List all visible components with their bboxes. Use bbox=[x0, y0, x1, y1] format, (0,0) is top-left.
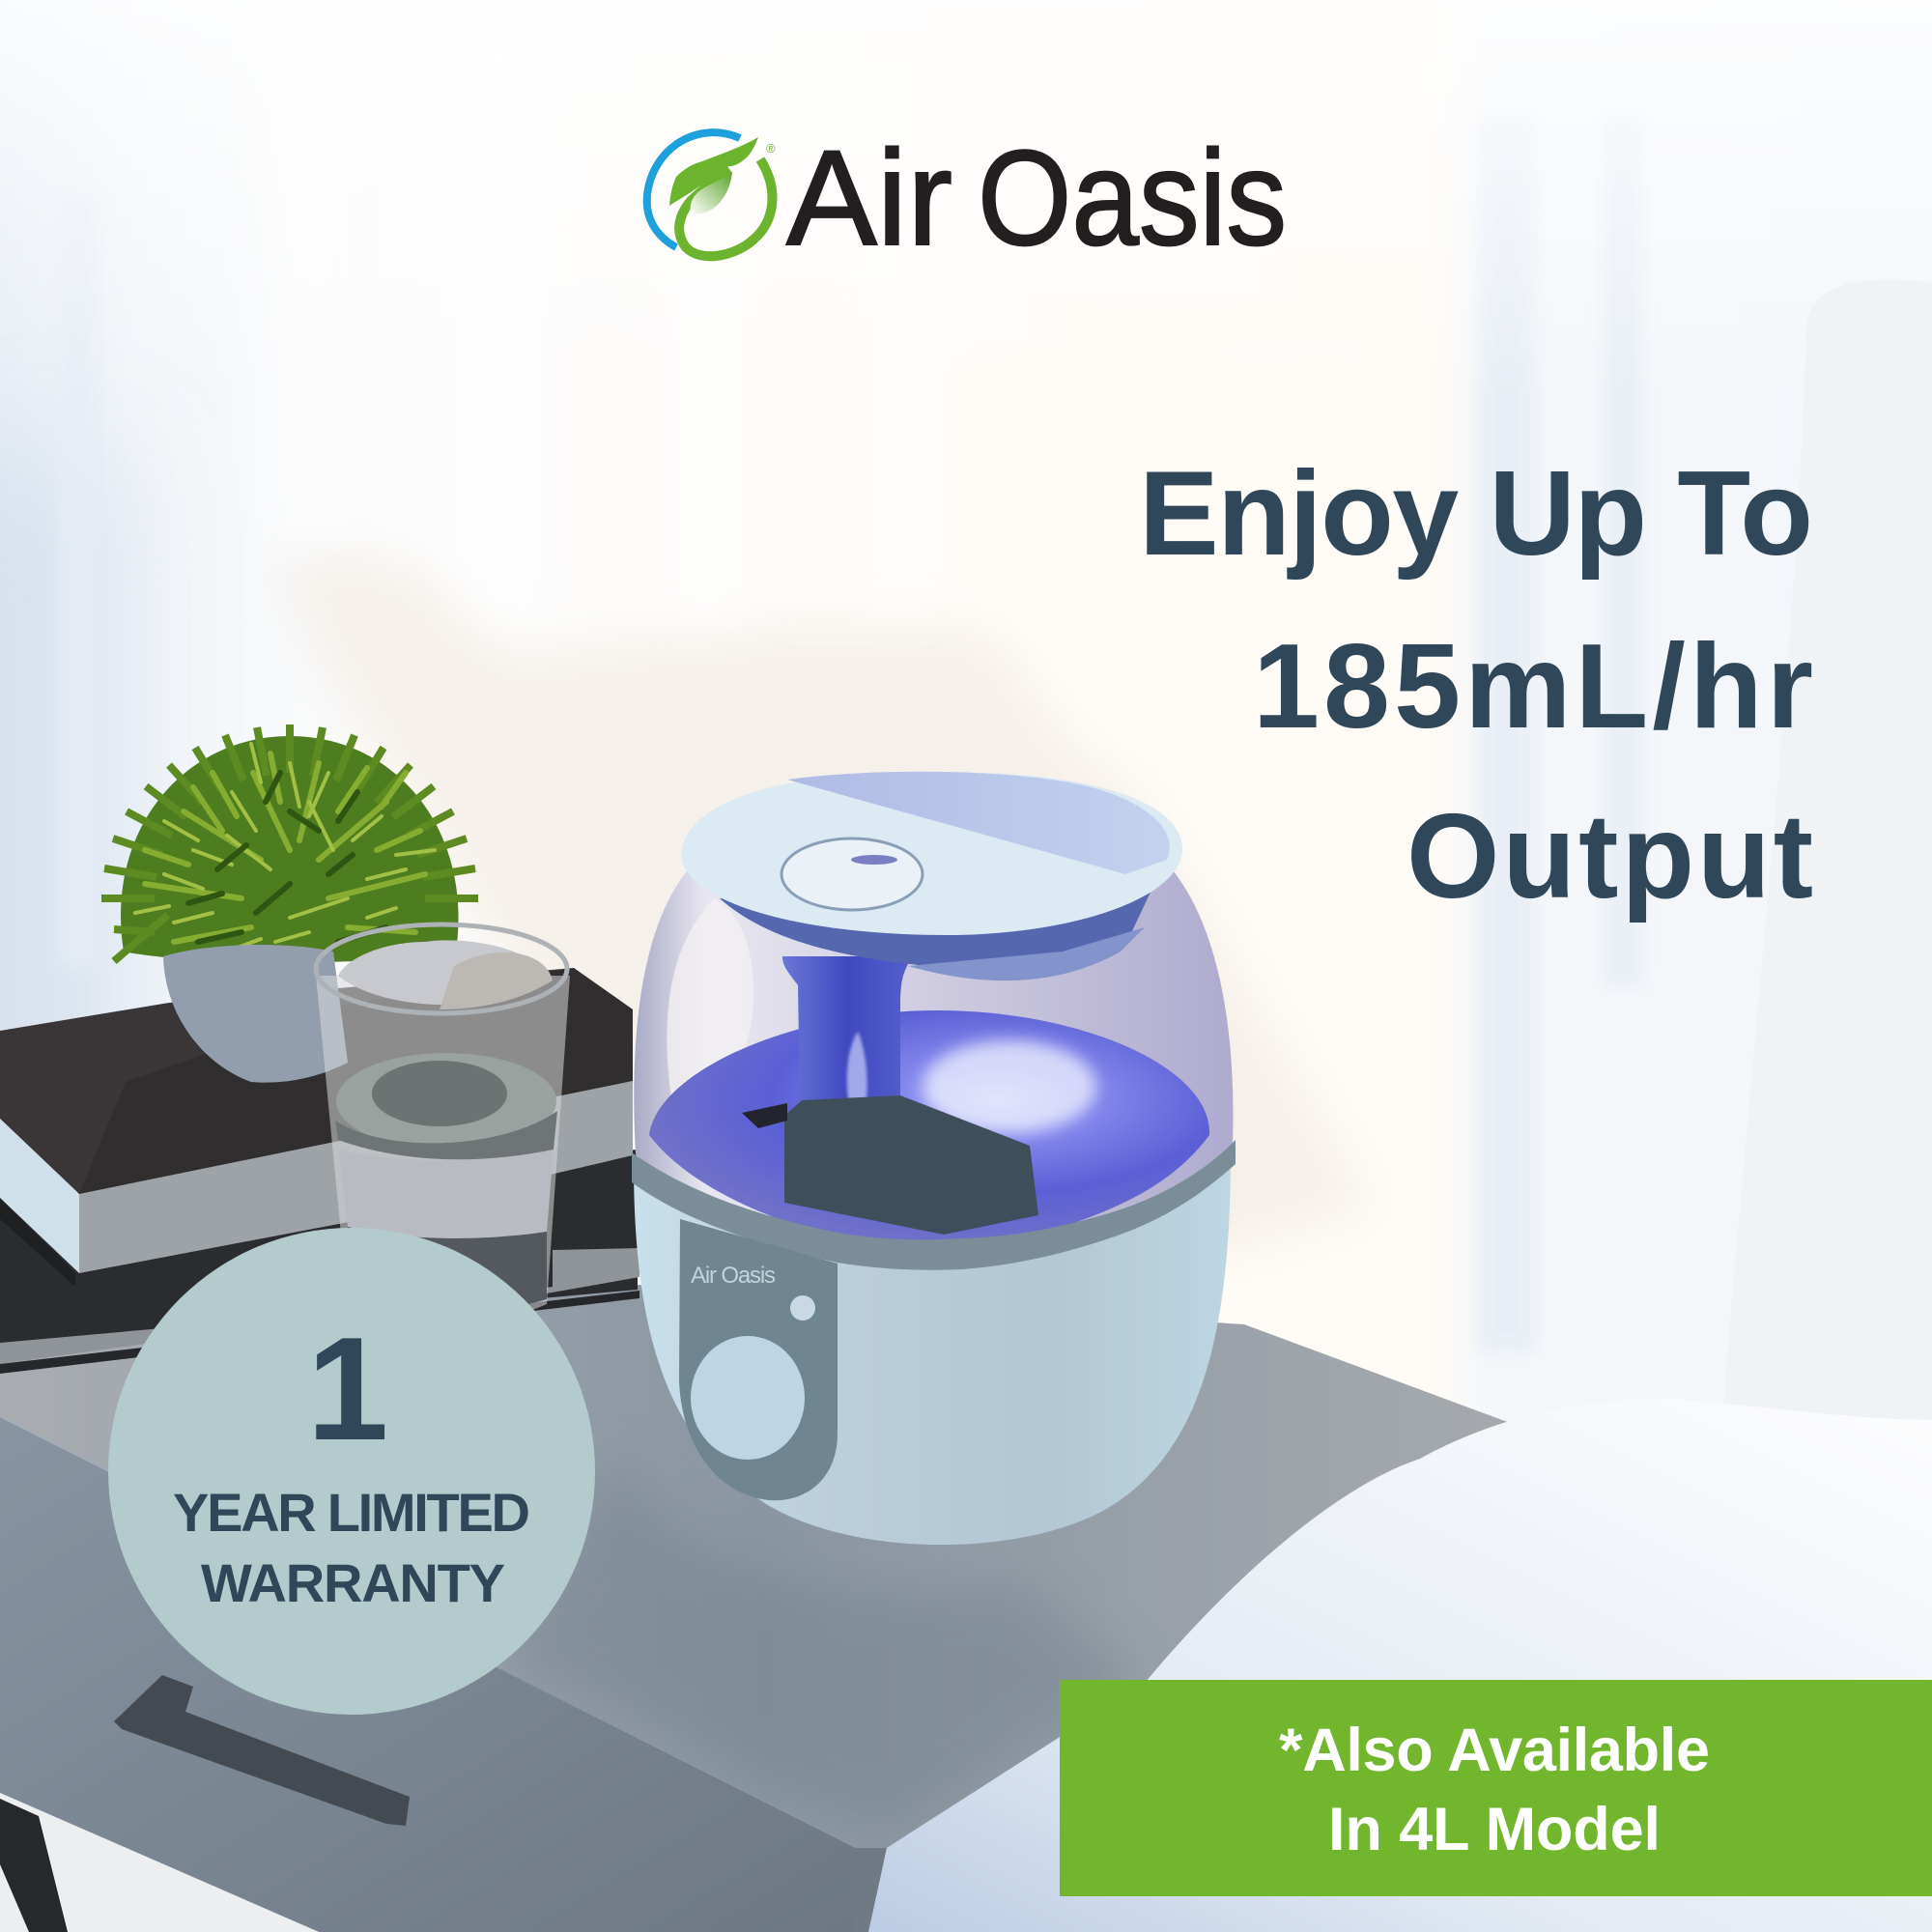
lid bbox=[682, 773, 1182, 935]
panel button bbox=[790, 1295, 815, 1321]
plant pot bbox=[163, 945, 348, 1083]
water band bbox=[335, 1111, 557, 1159]
warranty line 1: YEAR LIMITED bbox=[173, 1482, 530, 1543]
green callout banner bbox=[1060, 1680, 1932, 1896]
table drawer front bbox=[0, 1417, 856, 1932]
humidifier bbox=[632, 772, 1236, 1545]
chair back at right bbox=[1719, 280, 1932, 1468]
dial bbox=[691, 1336, 805, 1460]
table top surface bbox=[0, 1285, 1528, 1848]
glass body bbox=[316, 976, 570, 1320]
headline line 3: Output bbox=[1406, 790, 1813, 923]
headline line 2: 185mL/hr bbox=[1253, 620, 1813, 753]
side table bbox=[0, 1285, 1528, 1932]
lid underside bbox=[720, 884, 1154, 971]
warranty badge bbox=[108, 1228, 595, 1715]
pillow on bed bbox=[868, 1399, 1932, 1932]
logo icon bbox=[647, 132, 776, 256]
water surface bbox=[336, 1053, 556, 1150]
glass rim bbox=[316, 924, 567, 1013]
stacked books bbox=[0, 968, 639, 1374]
lid water window bbox=[787, 772, 1170, 874]
panel logo text: Air Oasis bbox=[691, 1263, 776, 1289]
warranty line 2: WARRANTY bbox=[201, 1552, 505, 1613]
transparent dome bbox=[634, 860, 1233, 1249]
plant foliage bbox=[121, 736, 459, 962]
banner line 2: In 4L Model bbox=[1328, 1796, 1661, 1863]
control panel bbox=[679, 1219, 838, 1500]
headline: output claim bbox=[1139, 447, 1813, 923]
banner line 1: *Also Available bbox=[1279, 1717, 1710, 1784]
table floor and leg bbox=[0, 1793, 319, 1932]
tank block bbox=[784, 1095, 1038, 1235]
logo wordmark Oasis: Oasis bbox=[978, 122, 1287, 273]
lower book bbox=[0, 1150, 638, 1348]
water body bbox=[338, 1150, 554, 1238]
top book cover bbox=[0, 968, 633, 1194]
plant bbox=[101, 724, 478, 1083]
table corner edge bbox=[856, 1848, 887, 1932]
illuminated water tank bbox=[649, 1010, 1209, 1243]
registered mark: ® bbox=[766, 141, 776, 156]
table shadow bbox=[502, 1449, 1140, 1840]
tank vent hole bbox=[742, 1103, 787, 1128]
column bbox=[782, 956, 913, 1101]
drawer handle bbox=[114, 1675, 410, 1826]
base rim band bbox=[632, 1140, 1236, 1270]
glass of water bbox=[316, 924, 570, 1320]
humidifier base bbox=[634, 1145, 1231, 1545]
lid knob bbox=[781, 838, 923, 910]
top book pages bbox=[79, 1081, 633, 1273]
warranty number: 1 bbox=[307, 1307, 388, 1471]
headline line 1: Enjoy Up To bbox=[1139, 447, 1813, 581]
logo wordmark Air: Air bbox=[786, 122, 952, 273]
logo bbox=[647, 122, 1287, 273]
